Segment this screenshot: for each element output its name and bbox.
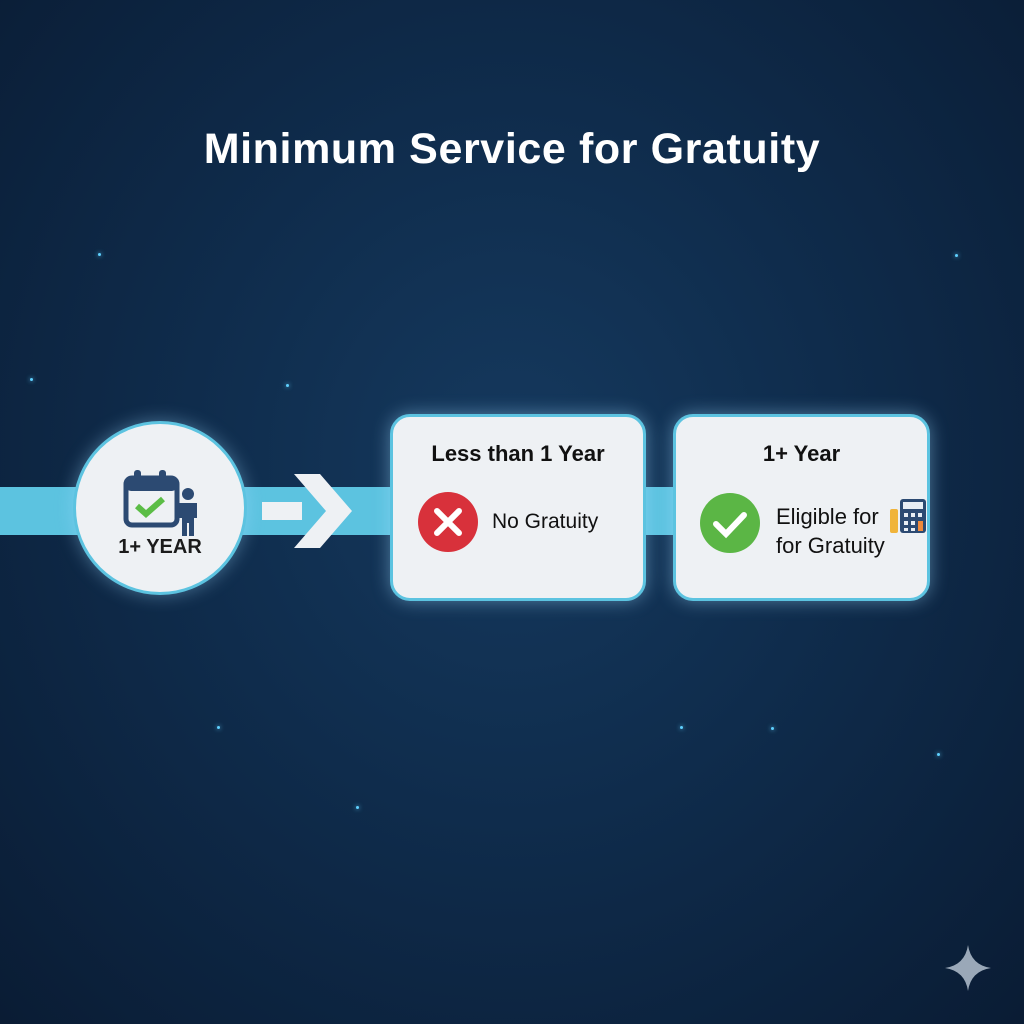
text: Eligible for <box>776 504 879 529</box>
heading: 1+ Year <box>763 441 840 466</box>
icon: calendar with person <box>124 470 197 536</box>
icon: calculator <box>890 499 926 533</box>
panel: 1+ year <box>673 414 930 601</box>
heading: Less than 1 Year <box>431 441 605 466</box>
start circle: 1+ year <box>73 421 247 595</box>
arrow <box>262 474 352 548</box>
icon: sparkle <box>945 945 991 991</box>
label: 1+ YEAR: 1+ YEAR <box>118 536 202 558</box>
timeline bar <box>0 487 680 535</box>
text: for Gratuity <box>776 533 885 558</box>
icon: red cross <box>418 492 478 552</box>
title: Minimum Service for Gratuity <box>204 125 820 173</box>
icon: green check <box>700 493 760 553</box>
text <box>776 504 885 558</box>
panel: less than 1 year <box>390 414 646 601</box>
text: No Gratuity <box>492 510 598 533</box>
